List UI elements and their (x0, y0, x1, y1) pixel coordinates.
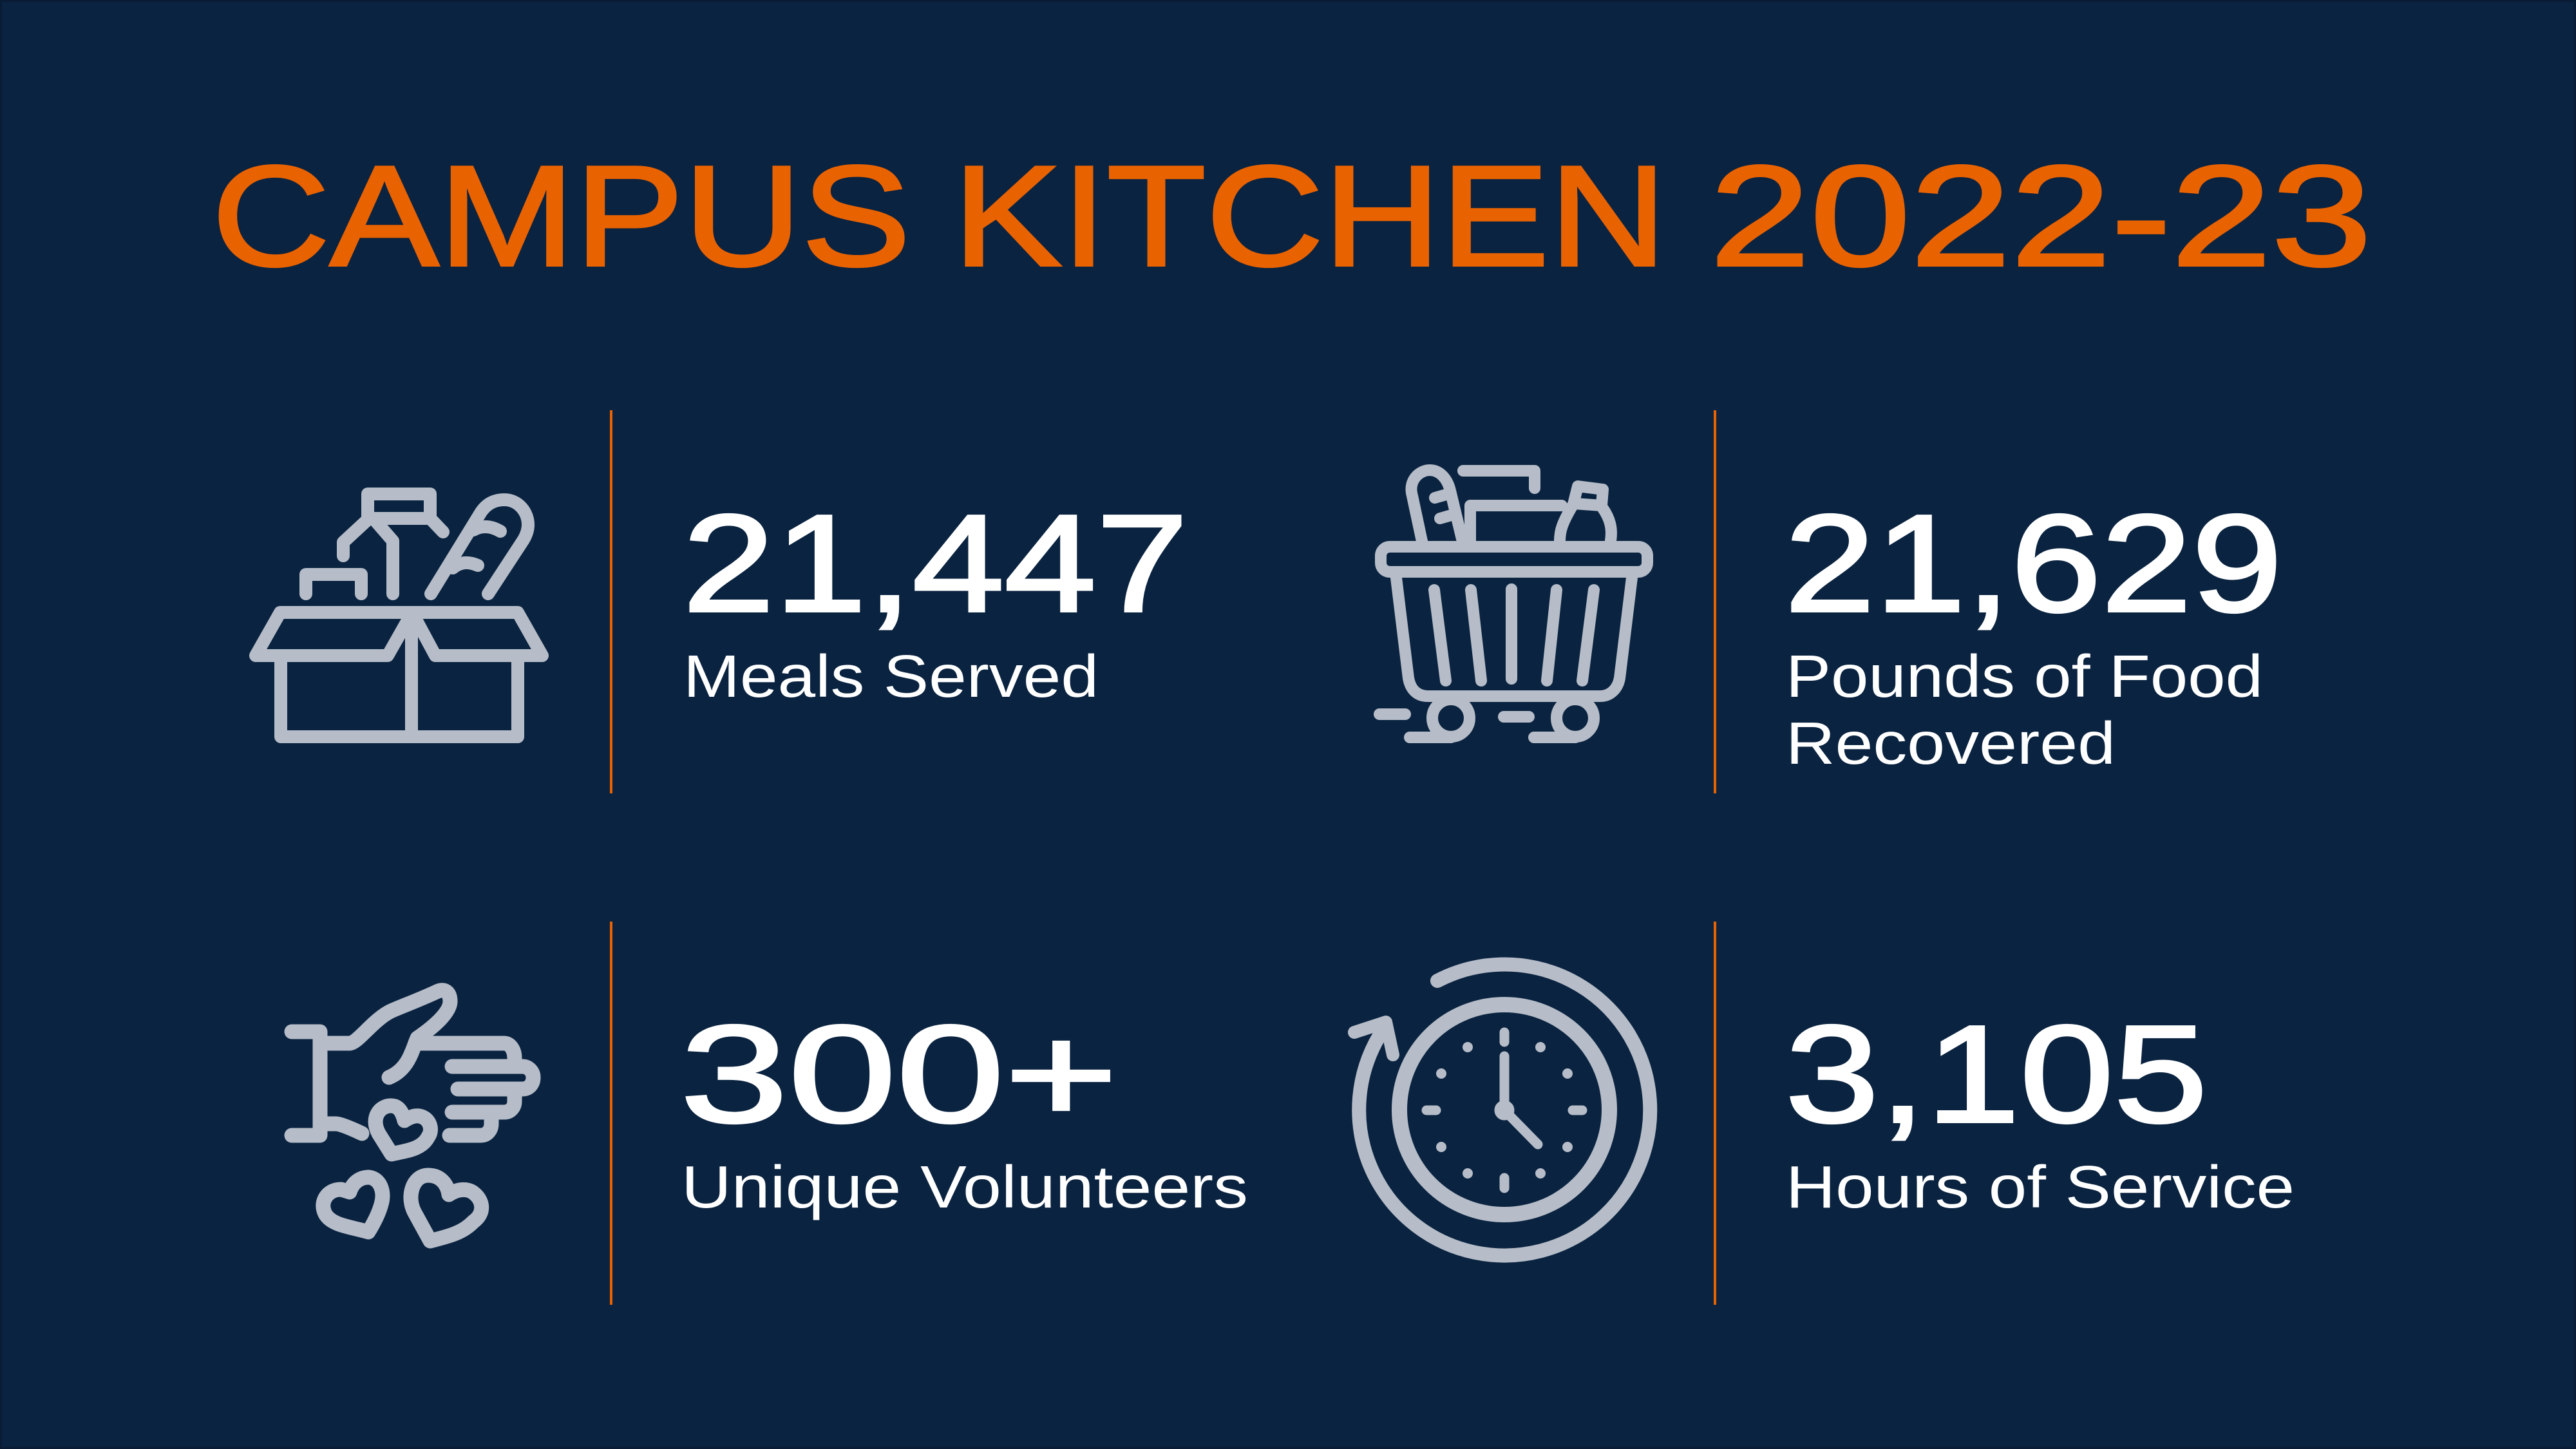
title: KITCHEN (953, 137, 1667, 296)
panel: pounds of food recovered (1379, 410, 2282, 793)
divider (610, 922, 612, 1305)
label: pounds of food recovered: Recovered (1786, 710, 2116, 777)
divider (610, 410, 612, 793)
icon: shopping basket (1379, 470, 1647, 737)
panel: unique volunteers (292, 922, 1248, 1305)
icon: clock with arrow (1354, 965, 1650, 1256)
stat: 21,447: 21,447 (683, 486, 1188, 641)
stat: 21,629: 21,629 (1785, 486, 2282, 641)
panel: hours of service (1354, 922, 2295, 1305)
divider (1714, 410, 1716, 793)
panel: meals served (256, 410, 1188, 793)
title: 2022-23 (1710, 137, 2372, 296)
title: CAMPUS (212, 137, 911, 296)
divider (1714, 922, 1716, 1305)
icon: food box (256, 494, 542, 737)
stat: 3,105: 3,105 (1785, 996, 2208, 1151)
label: hours of service: Hours of Service (1786, 1153, 2295, 1220)
label: unique volunteers: Unique Volunteers (681, 1153, 1248, 1220)
stat: 300+: 300+ (680, 996, 1118, 1151)
icon: giving hand with hearts (292, 990, 533, 1241)
label: meals served: Meals Served (683, 643, 1099, 710)
label: pounds of food recovered: Pounds of Food (1786, 643, 2263, 710)
